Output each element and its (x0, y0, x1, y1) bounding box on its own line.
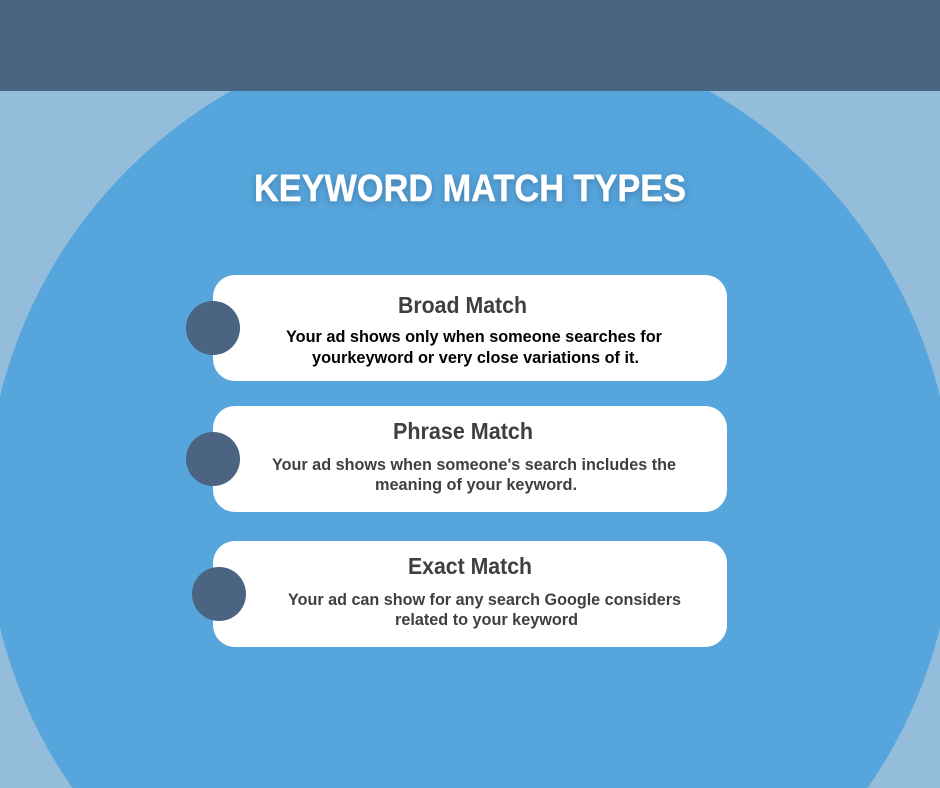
description: exact match: related to your keyword (395, 610, 578, 629)
card background (213, 275, 727, 381)
description: phrase match: meaning of your keyword. (375, 475, 577, 494)
title: KEYWORD MATCH TYPES (254, 168, 686, 210)
description: exact match (288, 590, 681, 629)
panel: phrase match (186, 406, 727, 512)
heading: phrase match: Phrase Match (393, 418, 533, 444)
heading: exact match: Exact Match (408, 553, 532, 579)
icon circle (192, 567, 246, 621)
card background (213, 541, 727, 647)
description: exact match: Your ad can show for any search Google considers (288, 590, 681, 609)
icon circle (186, 301, 240, 355)
description: phrase match (272, 455, 676, 494)
panel: broad match (186, 275, 727, 381)
icon circle (186, 432, 240, 486)
panel: exact match (192, 541, 727, 647)
top banner (0, 0, 940, 91)
heading: broad match: Broad Match (398, 292, 527, 318)
description: broad match: Your ad shows only when someone searches for (286, 327, 662, 346)
description: broad match (286, 327, 662, 367)
description: broad match: yourkeyword or very close variations of it. (312, 348, 639, 367)
description: phrase match: Your ad shows when someone's search includes the (272, 455, 676, 474)
card background (213, 406, 727, 512)
